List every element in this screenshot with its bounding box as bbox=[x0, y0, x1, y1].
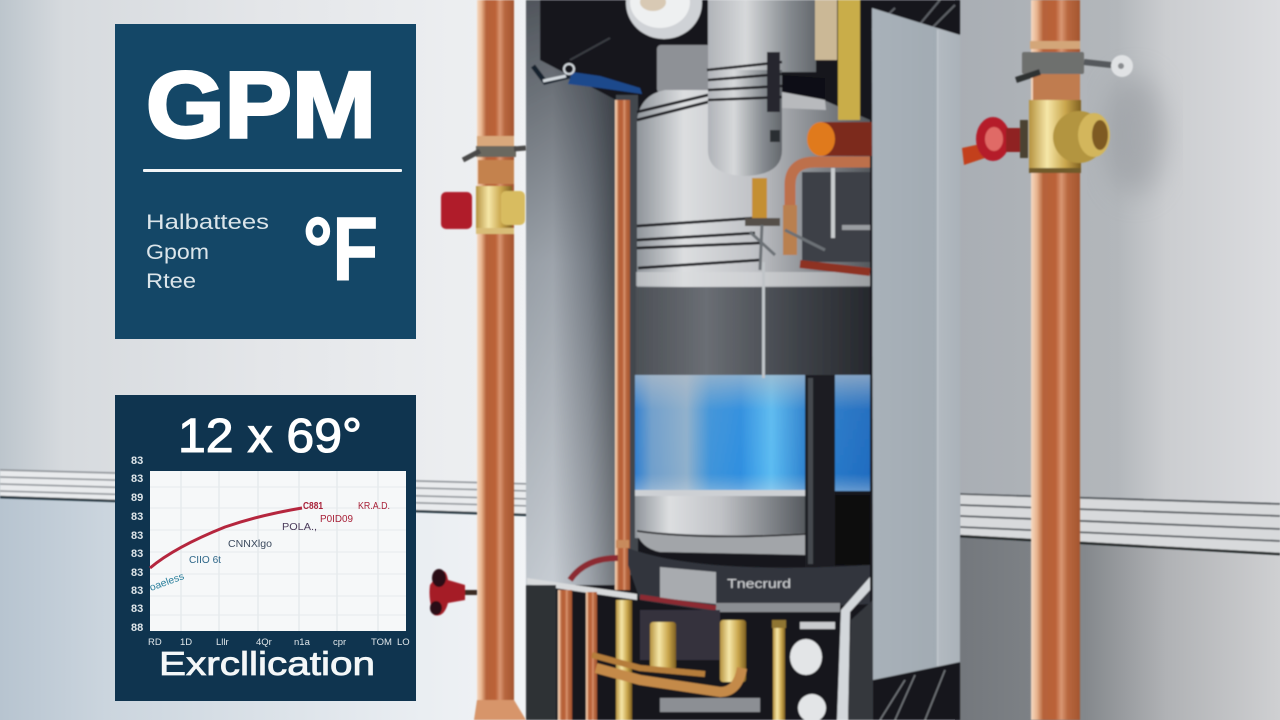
caption: Exrcllication bbox=[159, 645, 375, 682]
water heater cabinet bbox=[526, 0, 960, 720]
wires under door bbox=[880, 670, 945, 720]
wall trim strip right bbox=[960, 493, 1280, 554]
curve labels: oaeless bbox=[148, 571, 186, 594]
brass valve and needle bbox=[745, 178, 870, 378]
elbow bottom bbox=[474, 700, 526, 720]
y-axis labels: 89 bbox=[131, 492, 143, 504]
lower copper pipes bbox=[558, 590, 632, 720]
x-axis labels: n1a bbox=[294, 637, 311, 648]
panel: GPM bbox=[115, 24, 416, 339]
y-axis labels: 83 bbox=[131, 455, 143, 467]
x-axis labels: 1D bbox=[180, 637, 192, 648]
x-axis labels: LO bbox=[397, 637, 410, 648]
white round fitting bbox=[626, 0, 702, 39]
tank upper section bbox=[636, 90, 870, 290]
x-axis labels: RD bbox=[148, 637, 162, 648]
left copper pipe bbox=[441, 0, 526, 720]
cabinet left side panel bbox=[526, 0, 640, 585]
blue handle bbox=[533, 38, 642, 94]
tank dark section bbox=[636, 287, 870, 377]
door panel bbox=[872, 0, 960, 680]
side frame bbox=[837, 577, 873, 720]
dark window with rod bbox=[802, 168, 870, 262]
curve labels: P0ID09 bbox=[320, 514, 353, 525]
red hose and shelf bbox=[526, 558, 720, 720]
tank blue water section bbox=[635, 375, 870, 491]
x-axis labels: Lllr bbox=[216, 637, 229, 648]
copper elbow pipe bbox=[790, 162, 870, 255]
text block: units bbox=[146, 211, 269, 293]
pipe clamp bbox=[1016, 41, 1133, 100]
curve labels: C881 bbox=[303, 501, 323, 512]
tan and yellow pipes bbox=[815, 0, 860, 120]
brass tee bbox=[476, 186, 512, 232]
line chart bbox=[148, 471, 406, 631]
curve labels: CNNXlgo bbox=[228, 539, 272, 550]
curve labels: KR.A.D. bbox=[358, 501, 390, 512]
lower red valve bbox=[430, 569, 477, 616]
cabinet interior bbox=[526, 0, 960, 720]
right copper pipe bbox=[962, 0, 1133, 720]
text block: units: Halbattees bbox=[146, 211, 269, 234]
white insulation cluster bbox=[660, 622, 835, 720]
curve labels: CIIO 6t bbox=[189, 555, 221, 566]
pipe clamp bbox=[463, 146, 526, 184]
brass tee bbox=[1029, 100, 1110, 173]
red valve handle bbox=[962, 117, 1028, 165]
brass fittings bbox=[650, 620, 786, 720]
base label: Tnecrurd bbox=[727, 576, 791, 591]
tank neck bbox=[657, 45, 717, 93]
text block: units: Gpom bbox=[146, 241, 209, 264]
symbol: degrees F: °F bbox=[303, 200, 378, 300]
red valve bbox=[441, 192, 472, 229]
y-axis labels: 83 bbox=[131, 567, 143, 579]
orange cap and red cylinder bbox=[807, 122, 872, 156]
y-axis labels: 83 bbox=[131, 548, 143, 560]
y-axis labels: 83 bbox=[131, 473, 143, 485]
dark internal column bbox=[805, 375, 870, 567]
y-axis labels: 83 bbox=[131, 603, 143, 615]
tank base bbox=[628, 548, 870, 612]
y-axis labels: 83 bbox=[131, 511, 143, 523]
y-axis labels: 88 bbox=[131, 622, 143, 634]
x-axis labels: 4Qr bbox=[256, 637, 272, 648]
copper vertical pipe bbox=[615, 100, 630, 590]
curve labels bbox=[148, 501, 390, 594]
upper cylinder bbox=[707, 0, 826, 176]
y-axis labels: 83 bbox=[131, 585, 143, 597]
curve labels: POLA., bbox=[282, 522, 317, 533]
tank lower silver section bbox=[635, 490, 807, 555]
brass elbow pipes bbox=[592, 655, 742, 692]
red curve bbox=[150, 508, 302, 568]
x-axis labels: cpr bbox=[333, 637, 346, 648]
wall trim strip left bbox=[0, 470, 530, 515]
panel: flow chart bbox=[115, 395, 416, 701]
text block: units: Rtee bbox=[146, 270, 196, 293]
y-axis labels bbox=[131, 455, 143, 634]
y-axis labels: 83 bbox=[131, 530, 143, 542]
x-axis labels: TOM bbox=[371, 637, 392, 648]
x-axis labels bbox=[148, 637, 410, 648]
heading: GPM: GPM bbox=[146, 52, 376, 157]
heading: 12 x 69: 12 x 69° bbox=[178, 410, 362, 463]
